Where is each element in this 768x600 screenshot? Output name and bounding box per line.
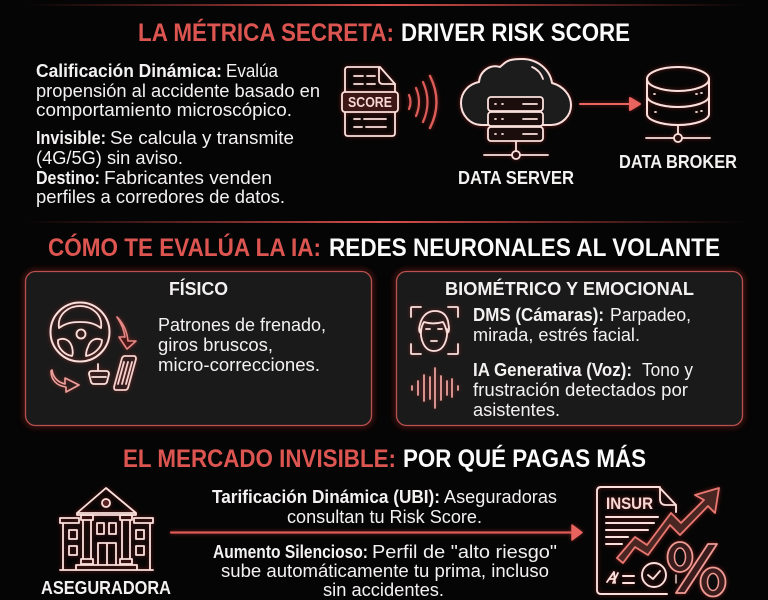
- text block: risk score description: Evalúa: [226, 60, 279, 81]
- title: how ai evaluates you: CÓMO TE EVALÚA LA IA:: [48, 232, 321, 262]
- title: invisible market: EL MERCADO INVISIBLE:: [123, 445, 396, 473]
- text: silent increase: [213, 541, 557, 600]
- text block: risk score description: (4G/5G) sin aviso.: [36, 147, 183, 168]
- panel: physical: [25, 271, 372, 426]
- text: physical patterns: [158, 314, 326, 375]
- text: dynamic pricing: consultan tu Risk Score.: [287, 506, 482, 527]
- text block: risk score description: Destino:: [36, 167, 100, 188]
- text: silent increase: Perfil de "alto riesgo": [372, 541, 557, 562]
- icon: insurance policy with rising chart: INSUR: [606, 495, 653, 513]
- icon: signal waves: [409, 76, 436, 128]
- title: how ai evaluates you: REDES NEURONALES AL VOLANTE: [329, 234, 720, 262]
- text: dynamic pricing: Aseguradoras: [444, 486, 557, 507]
- label: data broker: DATA BROKER: [619, 151, 737, 172]
- arrow: insurer to premium: [171, 525, 582, 540]
- text: physical patterns: giros bruscos,: [158, 334, 273, 355]
- icon: insurer building: [60, 488, 153, 570]
- icon: score document: [342, 67, 398, 136]
- title: driver risk score: [138, 18, 630, 47]
- title: invisible market: POR QUÉ PAGAS MÁS: [403, 444, 646, 473]
- icon: steering wheel and pedals: [50, 302, 136, 392]
- heading: biometric: BIOMÉTRICO Y EMOCIONAL: [445, 278, 694, 299]
- text: dms cameras: [473, 304, 691, 345]
- text: dms cameras: Parpadeo,: [610, 304, 691, 325]
- text block: risk score description: Fabricantes venden: [104, 167, 272, 188]
- icon: face scan: [411, 307, 458, 354]
- title: driver risk score: DRIVER RISK SCORE: [401, 19, 630, 47]
- text: physical patterns: micro-correcciones.: [158, 354, 320, 375]
- text: silent increase: sube automáticamente tu prima, incluso: [221, 560, 549, 581]
- text: physical patterns: Patrones de frenado,: [158, 314, 326, 335]
- text: generative ai voice: frustración detectados por: [473, 379, 688, 400]
- arrow: server to broker: [580, 98, 640, 110]
- text block: risk score description: propensión al accidente basado en: [36, 80, 320, 101]
- text block: risk score description: comportamiento microscópico.: [36, 99, 292, 120]
- text: generative ai voice: asistentes.: [473, 399, 560, 420]
- title: driver risk score: LA MÉTRICA SECRETA:: [138, 18, 394, 47]
- text: generative ai voice: [473, 359, 694, 420]
- text: dms cameras: DMS (Cámaras):: [473, 304, 604, 325]
- text block: risk score description: Se calcula y transmite: [110, 127, 294, 148]
- text: silent increase: sin accidentes.: [323, 579, 444, 600]
- heading: físico: FÍSICO: [169, 278, 228, 299]
- label: data server: DATA SERVER: [458, 167, 574, 188]
- label: insurer: ASEGURADORA: [41, 577, 171, 598]
- text: dynamic pricing: Tarificación Dinámica (UBI):: [212, 486, 440, 507]
- text: silent increase: Aumento Silencioso:: [213, 541, 368, 562]
- panel: biometric and emotional: [396, 271, 743, 426]
- text block: risk score description: [36, 60, 320, 207]
- text block: risk score description: perfiles a corredores de datos.: [36, 186, 285, 207]
- icon: data broker database: [646, 67, 710, 142]
- icon: score document: SCORE: [348, 94, 392, 111]
- text: dynamic pricing: [212, 486, 557, 527]
- title: how ai evaluates you: [48, 232, 720, 262]
- text block: risk score description: Calificación Dinámica:: [36, 60, 222, 81]
- text: dms cameras: mirada, estrés facial.: [473, 324, 640, 345]
- text: generative ai voice: IA Generativa (Voz):: [473, 359, 632, 380]
- text block: risk score description: Invisible:: [36, 127, 106, 148]
- icon: voice waveform: [412, 368, 458, 408]
- text: generative ai voice: Tono y: [642, 359, 694, 380]
- title: invisible market: [123, 444, 646, 473]
- icon: insurance policy with rising chart: [597, 487, 726, 596]
- icon: data server cloud: [461, 59, 571, 159]
